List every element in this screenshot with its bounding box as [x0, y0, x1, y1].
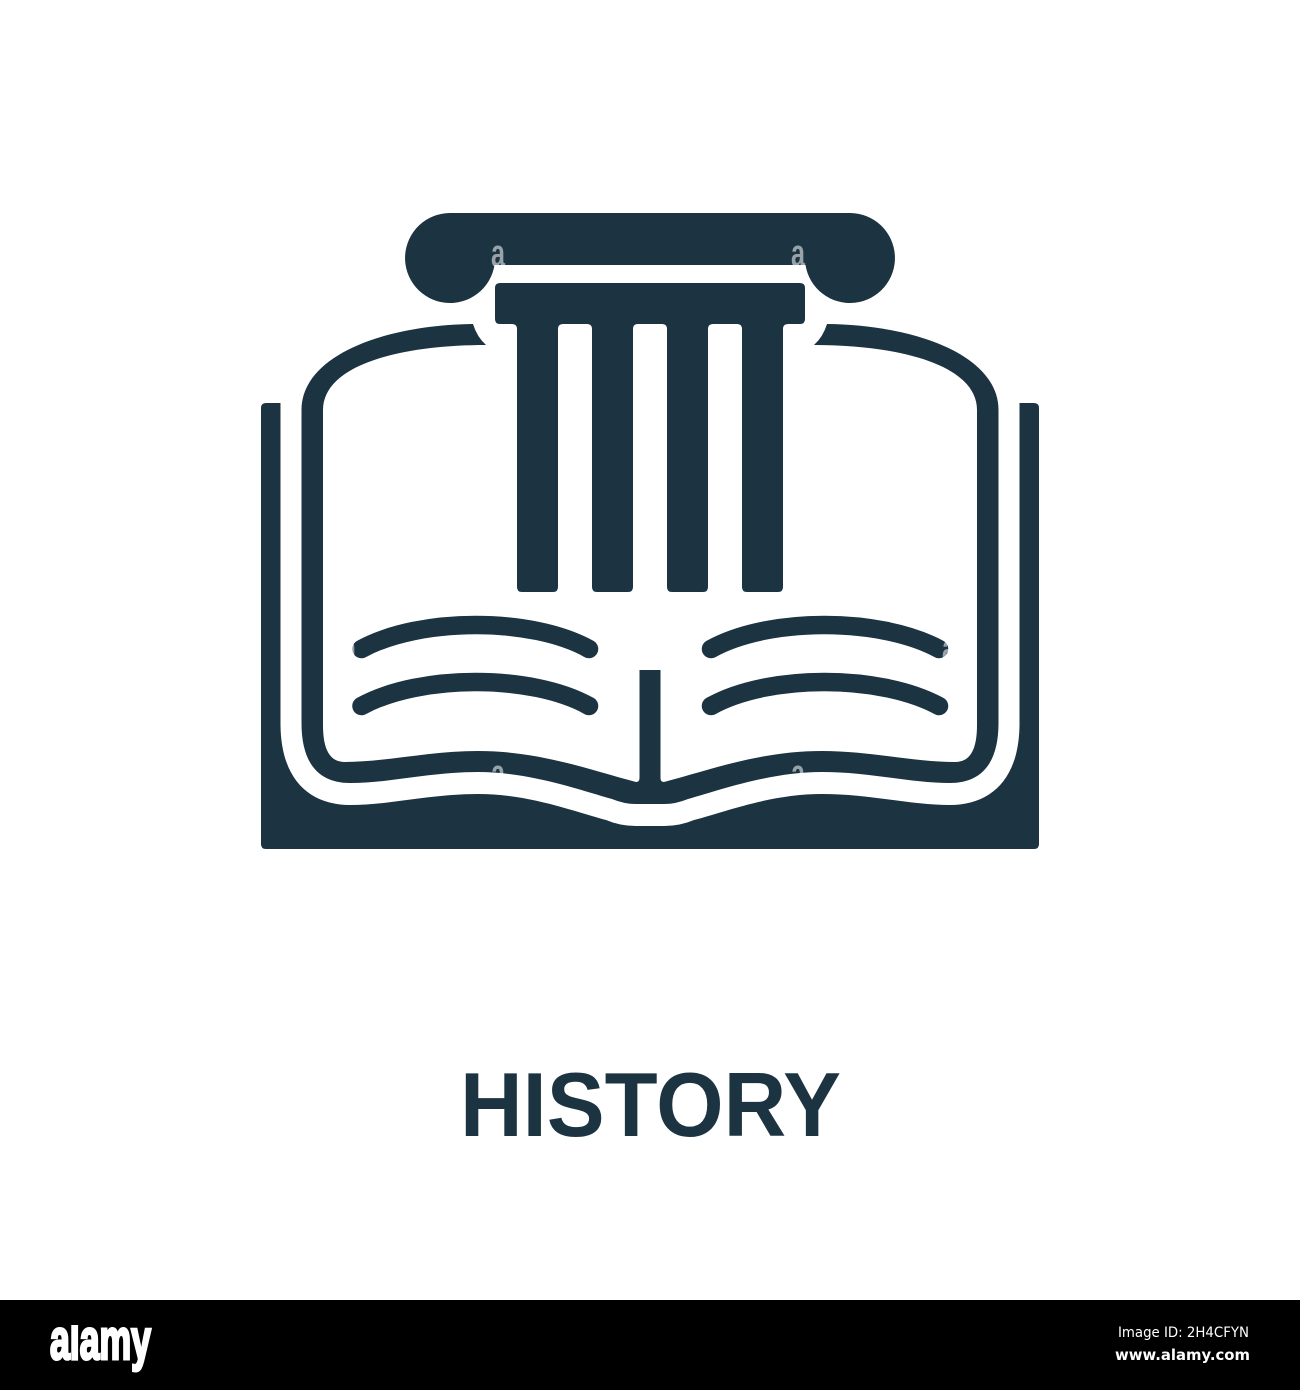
watermark marks: a — [342, 628, 357, 670]
icon part: book cover — [261, 403, 1039, 849]
footer logo: alamy: alamy — [50, 1308, 151, 1372]
watermark marks: a — [791, 233, 806, 275]
icon part: column scroll capital — [405, 213, 895, 303]
icon part: book pages outline right — [649, 324, 998, 804]
watermark marks: a — [791, 753, 806, 795]
icon part: book pages outline left — [302, 324, 651, 804]
icon part: text lines on pages — [362, 625, 939, 706]
watermark marks: a — [491, 753, 506, 795]
icon: open book with column — [261, 213, 1039, 849]
icon part: column abacus and shafts — [495, 283, 805, 592]
watermark marks — [342, 233, 957, 795]
footer image id: Image ID: 2H4CFYN — [1118, 1325, 1249, 1341]
title: HISTORY: HISTORY — [460, 1055, 841, 1156]
watermark marks: a — [491, 233, 506, 275]
footer website: www.alamy.com — [1115, 1346, 1250, 1364]
watermark marks: a — [942, 628, 957, 670]
footer bar — [0, 1300, 1300, 1390]
